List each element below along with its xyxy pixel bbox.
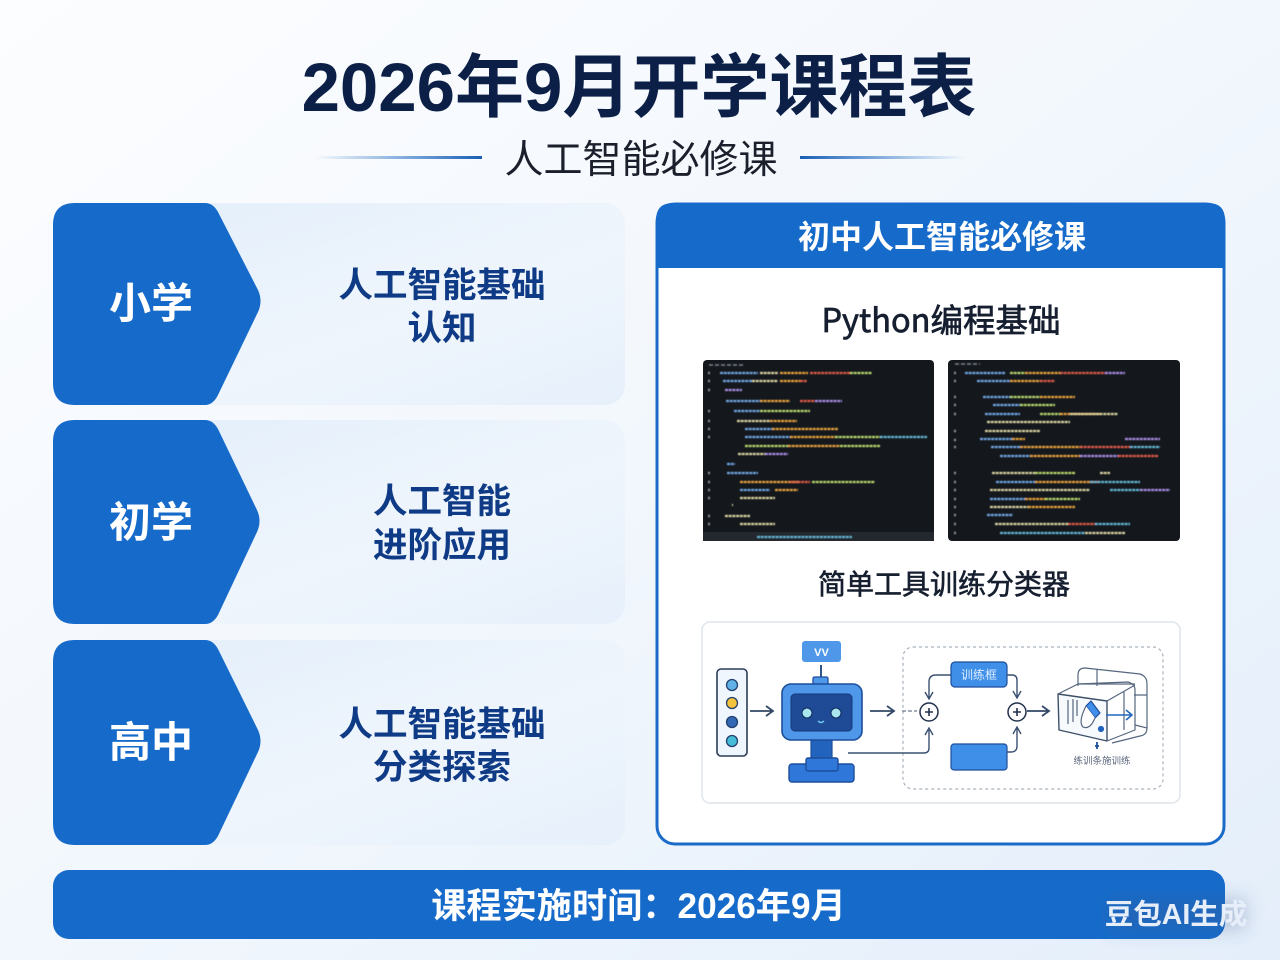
course: junior school: 进阶应用 xyxy=(373,527,511,565)
panel header xyxy=(656,203,1225,268)
heading: classifier: 简单工具训练分类器 xyxy=(818,563,1070,603)
panel: junior school xyxy=(53,420,625,624)
heading: python: Python编程基础 xyxy=(821,295,1061,342)
code screenshot: right xyxy=(948,360,1180,541)
code screenshot: left xyxy=(703,360,934,541)
icon: adder right xyxy=(1008,703,1026,721)
chevron: primary school xyxy=(53,203,260,405)
icon: robot xyxy=(782,641,862,782)
diagram: classifier training xyxy=(702,622,1180,803)
label: junior school: 初学 xyxy=(109,499,193,546)
icon: classifier box xyxy=(1058,668,1147,749)
watermark: 豆包AI生成 xyxy=(1105,899,1247,931)
chevron: junior school xyxy=(53,420,260,624)
subtitle: 人工智能必修课 xyxy=(504,139,778,182)
icon: adder left xyxy=(920,703,938,721)
arrow: adder to classifier xyxy=(1027,706,1049,716)
course: primary school: 认知 xyxy=(408,310,476,348)
panel: primary school xyxy=(53,203,625,405)
box: training set: 训练框 xyxy=(961,667,997,682)
title: 2026年9月开学课程表 xyxy=(302,49,976,126)
course: primary school: 人工智能基础 xyxy=(338,267,546,305)
course: senior school: 人工智能基础 xyxy=(338,706,546,744)
label: primary school: 小学 xyxy=(109,280,193,327)
footer bar: 课程实施时间：2026年9月 xyxy=(431,887,846,926)
footer bar xyxy=(53,870,1225,939)
label: classifier output: 练训条施训练 xyxy=(1073,755,1131,767)
chevron: senior school xyxy=(53,640,260,845)
panel header: 初中人工智能必修课 xyxy=(798,219,1086,255)
subtitle xyxy=(315,139,965,182)
box: blank module xyxy=(951,744,1007,770)
panel: senior school xyxy=(53,640,625,845)
course: junior school: 人工智能 xyxy=(373,483,511,521)
arrow: adder to training box xyxy=(925,675,951,699)
arrow: robot to adder xyxy=(848,728,933,753)
arrow: robot to trainer xyxy=(870,706,894,716)
course: senior school: 分类探索 xyxy=(373,749,511,787)
box: training set xyxy=(951,662,1007,687)
arrows: modules to adder xyxy=(1007,675,1021,752)
icon: input panel xyxy=(717,669,747,756)
label: senior school: 高中 xyxy=(109,719,193,766)
panel: junior AI course xyxy=(656,203,1225,844)
arrow: input to robot xyxy=(750,706,773,716)
icon: robot: VV xyxy=(814,647,829,659)
